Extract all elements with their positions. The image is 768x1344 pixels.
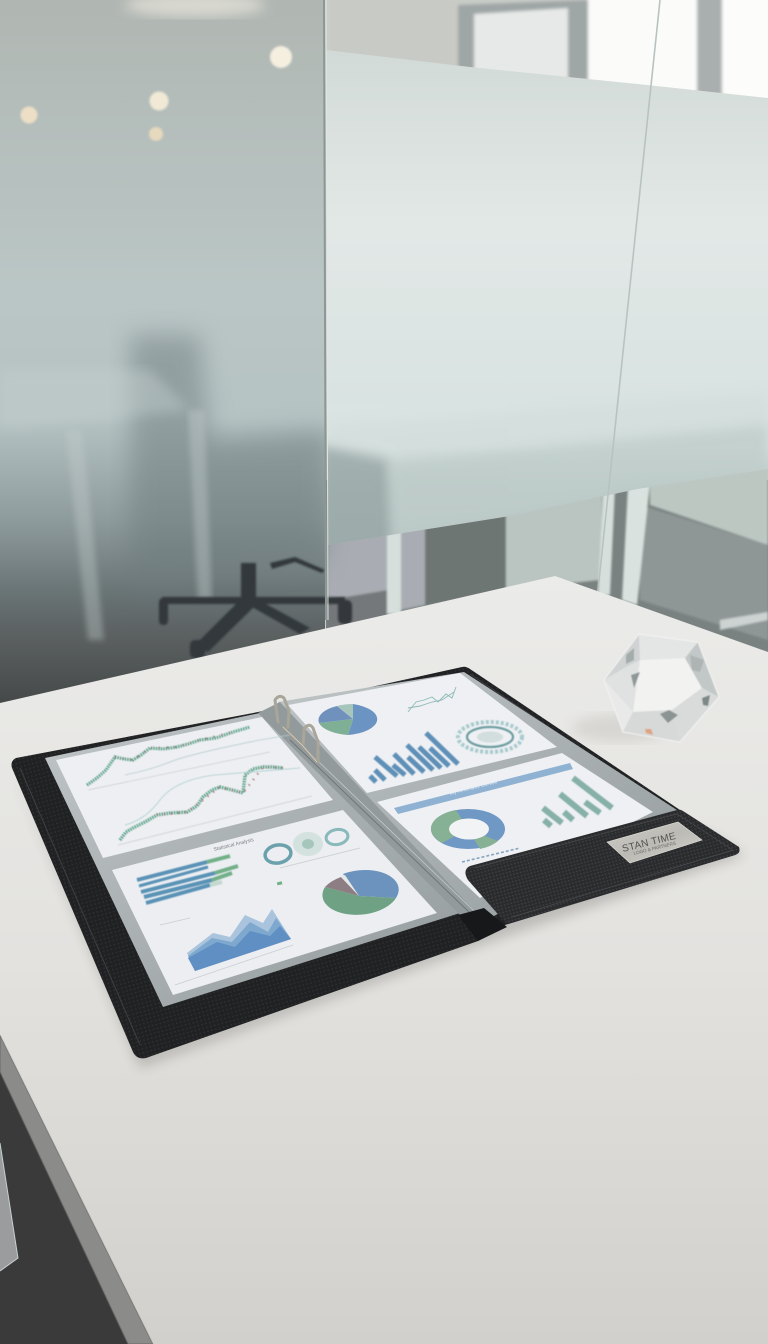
upper candlestick series <box>87 727 250 785</box>
crystal paperweight <box>604 634 719 742</box>
page: stock charts <box>56 717 333 858</box>
glass partition edges <box>324 0 660 620</box>
dark floor at bottom left <box>0 1030 160 1344</box>
area chart <box>160 909 293 985</box>
blue banner <box>394 763 573 814</box>
crystal shadow <box>572 714 668 742</box>
lower candlestick series <box>120 767 283 840</box>
plastic sleeves left <box>45 713 460 1007</box>
left frosted glass panel <box>0 0 325 720</box>
blue banner: Key Performance Overview <box>449 779 498 796</box>
blurred furniture behind left glass <box>0 335 330 640</box>
desk side face <box>0 1035 153 1344</box>
moving average lines <box>88 735 312 845</box>
bar chart <box>370 733 458 782</box>
pie chart green blue <box>322 870 399 915</box>
right frosted glass panel <box>320 50 768 555</box>
legend <box>277 881 282 885</box>
binder shadow <box>12 765 745 1068</box>
metal name plate <box>607 822 702 863</box>
radial wheel chart <box>458 722 522 752</box>
horizontal bar chart <box>137 856 238 903</box>
binder pocket flap <box>465 810 740 923</box>
binder cover <box>12 667 740 1058</box>
frosted pendant lights <box>20 46 292 141</box>
pie chart <box>318 704 377 735</box>
office chair base <box>159 557 352 658</box>
plate title: STAN TIME <box>621 831 677 855</box>
three small donuts <box>264 828 360 868</box>
plate subtitle: LOGO & PARTNERS <box>633 841 676 856</box>
donut chart <box>431 809 505 849</box>
legend row <box>462 848 520 862</box>
page: pie, bars, radial chart <box>288 673 557 793</box>
room seen through clear glass at top and bottom <box>0 0 768 720</box>
binder rings <box>275 696 318 762</box>
line chart <box>408 687 456 712</box>
page: bars, donuts, pie, area <box>112 810 437 995</box>
chart title: Statistical Analysis <box>213 837 255 853</box>
page: banner, donut, bars <box>377 753 653 898</box>
white desk <box>0 576 768 1344</box>
lower spine strap <box>458 908 507 941</box>
plastic sleeves right <box>278 672 680 925</box>
green bar chart <box>543 778 612 826</box>
central spine strip <box>258 702 480 917</box>
